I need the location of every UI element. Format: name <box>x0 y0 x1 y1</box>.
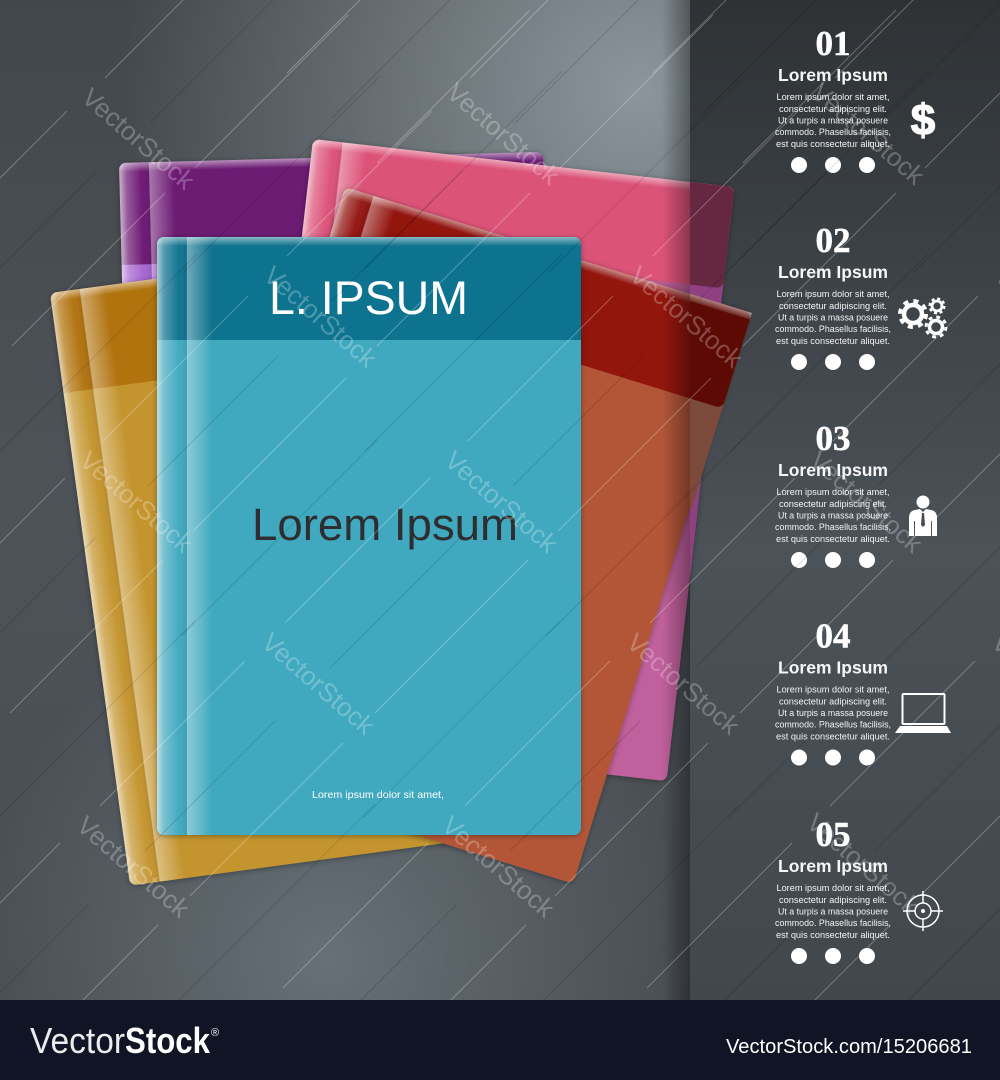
item 02 <box>775 221 891 370</box>
watermark text: VectorStock <box>256 627 381 741</box>
item 01: Lorem Ipsum <box>778 65 888 85</box>
item 03: consectetur adipiscing elit. <box>779 499 887 510</box>
watermark text: VectorStock <box>801 807 926 921</box>
watermark text: VectorStock <box>806 77 931 191</box>
item 03: Ut a turpis a massa posuere <box>778 510 888 522</box>
item 04: est quis consectetur aliquet. <box>776 732 890 742</box>
item 03: commodo. Phasellus facilisis, <box>775 522 891 533</box>
cover small text: Lorem ipsum dolor sit amet, <box>312 789 444 801</box>
item 01 <box>775 24 891 173</box>
item 04: Lorem Ipsum <box>778 658 888 678</box>
book: teal front cover <box>157 237 581 836</box>
footer logo: Vector <box>30 1020 125 1061</box>
books dimmed under right panel <box>690 182 752 574</box>
item 05: Lorem ipsum dolor sit amet, <box>776 883 890 894</box>
item 05: Ut a turpis a massa posuere <box>778 906 888 918</box>
book stack <box>50 0 752 1000</box>
item 04 <box>775 616 891 766</box>
watermark text: VectorStock <box>76 82 201 196</box>
item 05: commodo. Phasellus facilisis, <box>775 918 891 929</box>
fold shadow <box>662 0 690 1000</box>
item 02: Ut a turpis a massa posuere <box>778 312 888 324</box>
footer bar <box>0 1000 1000 1080</box>
icon: dollar: $ <box>911 96 935 145</box>
watermark text: VectorStock <box>436 810 561 924</box>
watermark text: VectorStock <box>804 445 929 559</box>
item 02: Lorem Ipsum <box>778 262 888 282</box>
icon: laptop <box>895 694 951 733</box>
watermark text: VectorStock <box>621 627 746 741</box>
item 04: Ut a turpis a massa posuere <box>778 708 888 719</box>
item 05: 05 <box>816 815 850 854</box>
footer url: VectorStock.com/15206681 <box>726 1036 972 1058</box>
item 04: Lorem ipsum dolor sit amet, <box>776 684 890 696</box>
icon: gears <box>900 299 946 337</box>
book: red <box>326 186 746 884</box>
item 02: commodo. Phasellus facilisis, <box>775 324 891 335</box>
cover subtitle: Lorem Ipsum <box>252 499 518 550</box>
item 05: consectetur adipiscing elit. <box>779 895 887 906</box>
watermark text: VectorStock <box>439 445 564 559</box>
item 02: consectetur adipiscing elit. <box>779 301 887 312</box>
icon: target <box>903 891 943 931</box>
watermark text: VectorStock <box>74 445 199 559</box>
item 03: Lorem ipsum dolor sit amet, <box>776 487 890 498</box>
item 02: 02 <box>816 221 850 260</box>
book: pink <box>300 139 734 782</box>
footer logo <box>30 1020 219 1061</box>
book: purple <box>118 150 546 284</box>
item 01: commodo. Phasellus facilisis, <box>775 127 891 138</box>
item 03: est quis consectetur aliquet. <box>776 534 890 545</box>
item 01: Lorem ipsum dolor sit amet, <box>776 92 890 103</box>
item 01: Ut a turpis a massa posuere <box>778 116 888 126</box>
watermark text <box>71 77 1000 924</box>
item 04: commodo. Phasellus facilisis, <box>775 720 891 730</box>
item 01: consectetur adipiscing elit. <box>779 104 887 115</box>
watermark text: VectorStock <box>624 260 749 374</box>
watermark text: VectorStock <box>258 260 383 374</box>
item 03: 03 <box>816 419 850 458</box>
watermark text: VectorStock <box>441 77 566 191</box>
background wall <box>0 0 690 1000</box>
item 03: Lorem Ipsum <box>778 460 888 480</box>
footer logo: Stock <box>125 1020 211 1061</box>
book: yellow <box>50 276 448 888</box>
footer logo: ® <box>211 1027 219 1039</box>
item 02: est quis consectetur aliquet. <box>776 336 890 347</box>
icon: person <box>909 496 937 536</box>
item 05: est quis consectetur aliquet. <box>776 930 890 941</box>
item 01: 01 <box>816 24 850 63</box>
item 01: est quis consectetur aliquet. <box>776 139 890 150</box>
watermark text: VectorStock <box>71 810 196 924</box>
item 02: Lorem ipsum dolor sit amet, <box>776 289 890 300</box>
item 05 <box>775 815 891 964</box>
right dark panel <box>690 0 1000 1000</box>
item 04: consectetur adipiscing elit. <box>779 696 887 708</box>
item 05: Lorem Ipsum <box>778 856 888 876</box>
item 04: 04 <box>816 616 850 656</box>
cover title: L. IPSUM <box>269 271 468 324</box>
item 03 <box>775 419 891 568</box>
